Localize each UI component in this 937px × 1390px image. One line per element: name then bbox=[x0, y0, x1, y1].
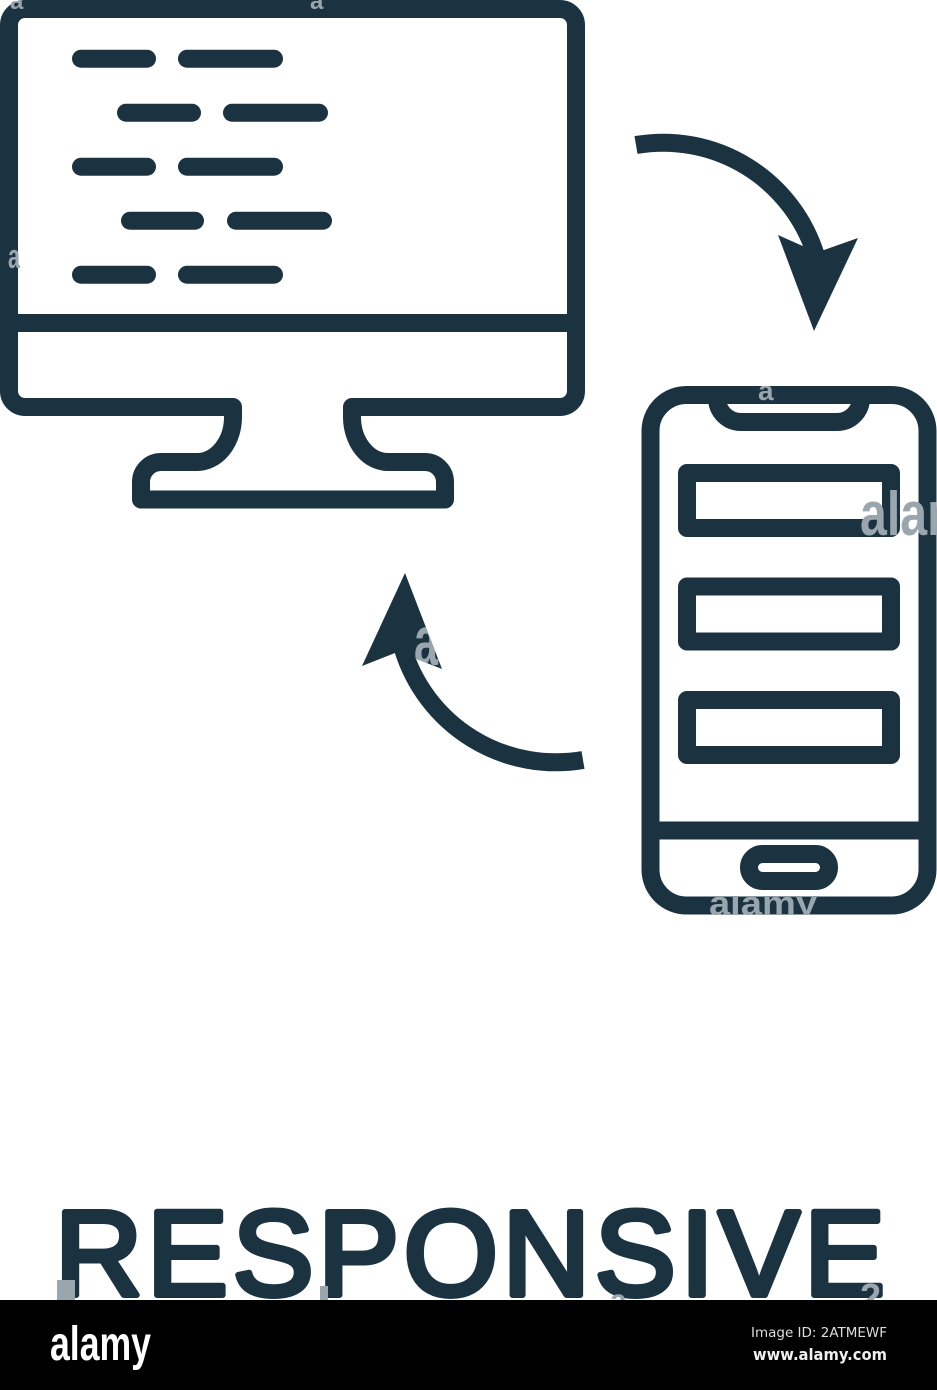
content block 2 bbox=[687, 586, 891, 642]
monitor screen divider bbox=[9, 314, 576, 332]
watermark fragments: a bbox=[8, 238, 21, 276]
phone bottom divider bbox=[650, 822, 928, 840]
phone body bbox=[650, 395, 928, 906]
watermark fragments: a bbox=[414, 602, 439, 680]
content block 3 bbox=[687, 700, 891, 755]
icon: desktop monitor bbox=[9, 9, 576, 500]
footer logo: alamy bbox=[50, 1318, 151, 1371]
website: www.alamy.com bbox=[753, 1345, 887, 1364]
watermark fragments: a bbox=[758, 375, 774, 406]
phone notch bbox=[717, 395, 861, 422]
content block 1 bbox=[687, 473, 891, 528]
code lines on screen bbox=[81, 59, 323, 275]
watermark fragments: 2 bbox=[860, 1277, 881, 1319]
watermark fragments: a bbox=[610, 1284, 627, 1317]
watermark fragments: alamy bbox=[709, 885, 817, 923]
monitor body and stand outline bbox=[9, 9, 576, 500]
footer bar bbox=[0, 1300, 937, 1390]
title: RESPONSIVE bbox=[55, 1185, 885, 1321]
arrow: phone to desktop bbox=[362, 573, 583, 762]
icon: smartphone bbox=[650, 395, 928, 906]
home button bbox=[749, 854, 829, 881]
arrow: desktop to phone bbox=[636, 143, 858, 331]
image id: Image ID: 2ATMEWF bbox=[751, 1325, 887, 1341]
